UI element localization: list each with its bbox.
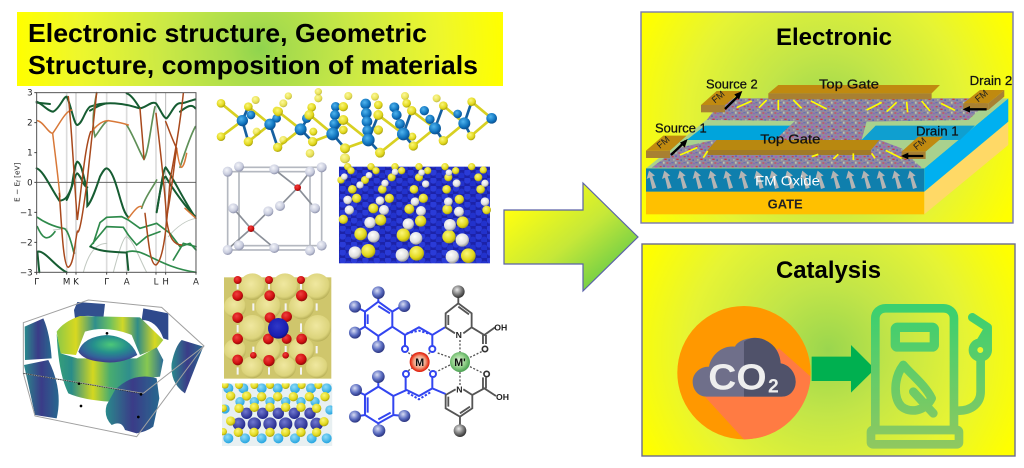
- y axis ticks: 1: [27, 149, 33, 159]
- x axis ticks: Γ: [104, 277, 109, 287]
- Fermi surface 3D plot: [23, 300, 204, 437]
- metal atom M prime: M': [454, 357, 466, 369]
- x axis ticks: A: [124, 277, 130, 287]
- y axis ticks: 3: [27, 89, 33, 99]
- title line 2: Structure, composition of materials: [28, 50, 478, 80]
- FM electrodes: FM: [655, 134, 672, 151]
- y axis label: f: [17, 180, 23, 182]
- metal complex molecule: [349, 285, 509, 437]
- unit cell cube: [223, 162, 327, 256]
- title banner: [17, 12, 503, 86]
- FM oxide layer: FM Oxide: [755, 172, 820, 188]
- top gate back: [768, 85, 940, 99]
- y axis ticks: −1: [20, 208, 33, 218]
- x axis ticks: [34, 277, 199, 287]
- device labels: [655, 73, 1012, 147]
- nitrogen and hydroxyl labels: [456, 323, 509, 402]
- nitrogen and hydroxyl labels: OH: [494, 323, 507, 333]
- icon: CO2 cloud: 2: [768, 376, 779, 397]
- layered lattice side view: [220, 381, 335, 446]
- black current arrows: [671, 94, 987, 156]
- big arrow: [504, 183, 638, 291]
- device labels: Source 2: [706, 76, 758, 91]
- band structure chart: [12, 89, 199, 287]
- y axis ticks: −3: [20, 268, 33, 278]
- FM electrodes: [646, 88, 1004, 159]
- x axis ticks: M: [63, 277, 70, 287]
- FM electrodes: FM: [710, 89, 727, 105]
- icon: green fuel pump: [871, 308, 988, 444]
- FM electrodes: FM: [973, 88, 990, 104]
- yellow spin arrows: [680, 100, 955, 160]
- y axis label: E − E: [12, 182, 21, 202]
- device labels: Source 1: [655, 120, 707, 135]
- top gate front: [708, 140, 879, 155]
- y axis ticks: [20, 89, 33, 278]
- x axis ticks: A: [193, 277, 199, 287]
- metal atom M: M: [415, 357, 424, 369]
- gate layer: [646, 122, 1008, 214]
- FM electrodes: FM: [911, 136, 928, 152]
- FM oxide layer: [646, 98, 1008, 192]
- icon: CO2 cloud: CO: [708, 356, 767, 397]
- y axis ticks: −2: [20, 238, 33, 248]
- arrow: conversion: [812, 345, 875, 393]
- nitrogen and hydroxyl labels: N: [456, 330, 462, 340]
- title line 1: Electronic structure, Geometric: [28, 18, 427, 48]
- y axis ticks: 2: [27, 119, 33, 129]
- nitrogen and hydroxyl labels: N: [456, 385, 463, 395]
- x axis ticks: H: [162, 277, 169, 287]
- nitrogen and hydroxyl labels: OH: [496, 392, 509, 402]
- MoS2 atomic chain: [217, 88, 497, 163]
- y axis label: [eV]: [12, 162, 21, 180]
- device labels: Top Gate: [760, 132, 820, 147]
- surface slab image: [337, 163, 491, 263]
- x axis ticks: L: [154, 277, 159, 287]
- x axis ticks: K: [73, 277, 79, 287]
- gate layer: GATE: [768, 196, 803, 211]
- spin-transport noise layer: [652, 98, 988, 168]
- metal atom M: [410, 352, 430, 372]
- electronic heading: Electronic: [776, 24, 892, 51]
- icon: CO2 cloud: [677, 306, 811, 439]
- channel surface: [646, 98, 1008, 168]
- catalysis heading: Catalysis: [776, 257, 881, 284]
- device labels: Drain 2: [970, 73, 1012, 88]
- device schematic: [646, 73, 1012, 214]
- device labels: Drain 1: [916, 124, 959, 139]
- panel: catalysis: [642, 244, 1015, 456]
- oxide surface top view: [224, 273, 331, 379]
- y axis ticks: 0: [27, 178, 33, 188]
- panel: electronic: [641, 12, 1013, 223]
- metal atom M prime: [450, 352, 470, 372]
- device labels: Top Gate: [819, 76, 879, 91]
- x axis ticks: Γ: [34, 277, 39, 287]
